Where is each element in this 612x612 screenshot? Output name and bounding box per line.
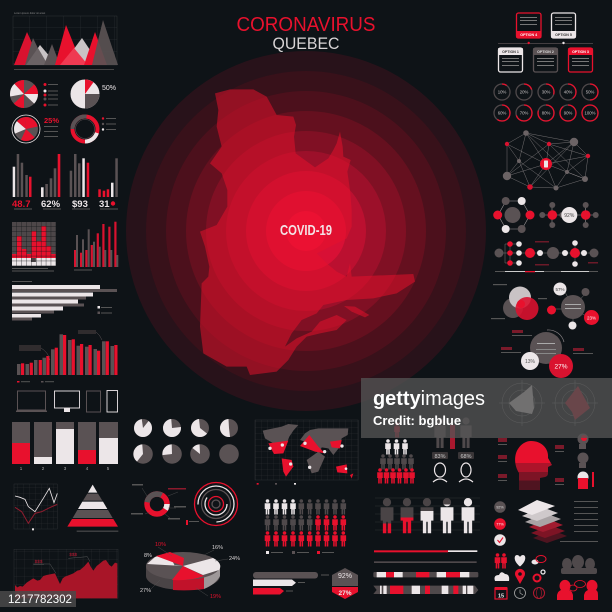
venn diagram	[491, 284, 547, 320]
legend	[102, 117, 116, 131]
percent circles: 30%	[542, 90, 550, 94]
world map	[255, 420, 358, 485]
pie labels: 19%	[210, 594, 221, 600]
hub diagrams	[493, 197, 599, 233]
hexagon badge: 92%	[338, 573, 352, 580]
process node chain	[494, 240, 598, 272]
grouped column chart	[17, 330, 118, 382]
percent label: 50%	[102, 85, 116, 92]
bar group values: 48.7	[12, 199, 30, 210]
icon: gears	[534, 570, 545, 582]
pie labels: 27%	[140, 588, 151, 594]
option 5: OPTION 5	[555, 33, 572, 37]
gender comparison	[432, 417, 474, 482]
stat badges: 92%	[496, 506, 504, 510]
pie labels: 10%	[155, 542, 166, 548]
network diagram	[503, 130, 590, 190]
bubble diagram bottom: 27%	[554, 364, 568, 370]
horizontal bar chart	[12, 281, 117, 320]
icon: cloud	[494, 572, 509, 581]
bubble diagram right: 23%	[587, 316, 596, 320]
concentric ring chart	[186, 482, 238, 526]
people hierarchy	[377, 422, 415, 484]
percent circles: 60%	[498, 110, 506, 116]
icon: phone	[107, 390, 118, 412]
bubble diagram bottom	[501, 330, 593, 378]
bar group values: 31	[99, 199, 110, 210]
pie labels: 16%	[212, 545, 223, 551]
radar chart right	[552, 380, 598, 426]
icon: tablet	[86, 391, 100, 412]
small pies row	[133, 419, 239, 464]
radar chart left	[499, 380, 545, 426]
people heads group	[557, 555, 598, 600]
percent label: 25%	[44, 116, 59, 125]
triangle area chart	[13, 11, 118, 70]
icon: man	[459, 463, 473, 482]
percent circles: 80%	[542, 110, 550, 116]
map of Quebec	[200, 89, 415, 375]
icon: clock	[514, 588, 526, 598]
icon set	[494, 553, 546, 600]
pie chart 3	[12, 115, 59, 143]
icon: monitor	[54, 391, 80, 412]
radial rings and map	[126, 51, 486, 411]
icon: laptop	[16, 391, 47, 412]
icon: woman	[433, 463, 447, 482]
percent circles: 90%	[564, 110, 572, 116]
pie labels: 8%	[144, 553, 152, 559]
speaking figures	[557, 580, 598, 600]
option 3: OPTION 3	[572, 50, 589, 54]
stock id box	[0, 591, 76, 607]
percent circles: 50%	[586, 90, 594, 94]
red regions	[268, 435, 353, 478]
percent circles: 70%	[520, 110, 528, 116]
device icons	[16, 390, 118, 412]
percent circles	[494, 84, 598, 121]
icon: calendar: 15	[498, 594, 504, 600]
subtitle: QUEBEC	[272, 35, 340, 53]
head infographic	[498, 434, 594, 490]
bar group values	[12, 199, 118, 210]
bubble diagram right: 57%	[555, 287, 565, 292]
icon: map pin	[515, 569, 525, 584]
percent circles: 100%	[584, 110, 596, 116]
bubble diagram right	[547, 282, 599, 330]
pictogram people grid	[265, 499, 346, 554]
stock id box: 1217782302	[8, 594, 72, 606]
percent circles: 40%	[564, 90, 572, 94]
icon: people	[495, 553, 507, 568]
stacked percentage bars: 3	[64, 466, 67, 471]
percent circles: 20%	[520, 90, 528, 94]
triangle area chart: Lorem ipsum dolor sit amet	[14, 11, 46, 15]
stacked percentage bars: 5	[107, 466, 110, 471]
3D pie chart	[140, 542, 240, 600]
watermark band: gettyimages	[373, 388, 485, 410]
option cards	[498, 13, 593, 72]
pie labels: 24%	[229, 556, 240, 562]
legend	[44, 83, 58, 106]
option 1: OPTION 1	[502, 50, 519, 54]
pie labels	[140, 542, 240, 600]
stacked percentage bars: 4	[86, 466, 89, 471]
watermark band: Credit: bgblue	[373, 413, 461, 428]
small heads	[578, 434, 594, 489]
stacked percentage bars	[12, 422, 118, 471]
line chart	[14, 484, 57, 530]
area chart: $$$	[69, 552, 78, 557]
icon: heart	[515, 555, 525, 566]
hexagon badge: 27%	[338, 590, 352, 597]
map label: COVID-19	[280, 222, 332, 239]
bubble diagram bottom: 13%	[525, 359, 536, 365]
option 4: OPTION 4	[520, 33, 537, 37]
stat badges	[494, 501, 506, 546]
pyramid chart	[67, 485, 118, 532]
bar group values: 62%	[41, 199, 61, 210]
land	[263, 424, 348, 473]
paired bar chart	[74, 222, 118, 270]
pie chart 1	[17, 83, 58, 106]
hexagon badge	[332, 568, 358, 599]
pie chart 2	[78, 85, 116, 101]
gender comparison: 83%	[434, 454, 446, 460]
sliders and striped bands	[373, 550, 478, 594]
watermark band	[361, 378, 612, 438]
five figures progress	[375, 498, 480, 533]
segmented donut with labels	[131, 484, 186, 520]
donut chart	[72, 116, 116, 142]
area chart	[14, 549, 118, 598]
progress pills	[253, 572, 329, 594]
area chart: $$$	[35, 559, 43, 564]
waffle chart	[12, 222, 56, 272]
bar group values: $93	[72, 199, 88, 210]
percent circles: 10%	[498, 90, 506, 94]
stacked percentage bars: 2	[42, 466, 45, 471]
option 2: OPTION 2	[537, 50, 554, 54]
vertical bar groups	[13, 154, 118, 197]
icon: speech clouds	[532, 556, 546, 564]
stacked layers diagram	[518, 500, 598, 543]
icon: globe	[534, 588, 544, 598]
stacked percentage bars: 1	[20, 466, 23, 471]
stat badges: 77%	[496, 522, 504, 526]
hub diagrams: 92%	[564, 213, 575, 219]
gender comparison: 68%	[460, 454, 472, 460]
title: CORONAVIRUS	[236, 14, 376, 36]
